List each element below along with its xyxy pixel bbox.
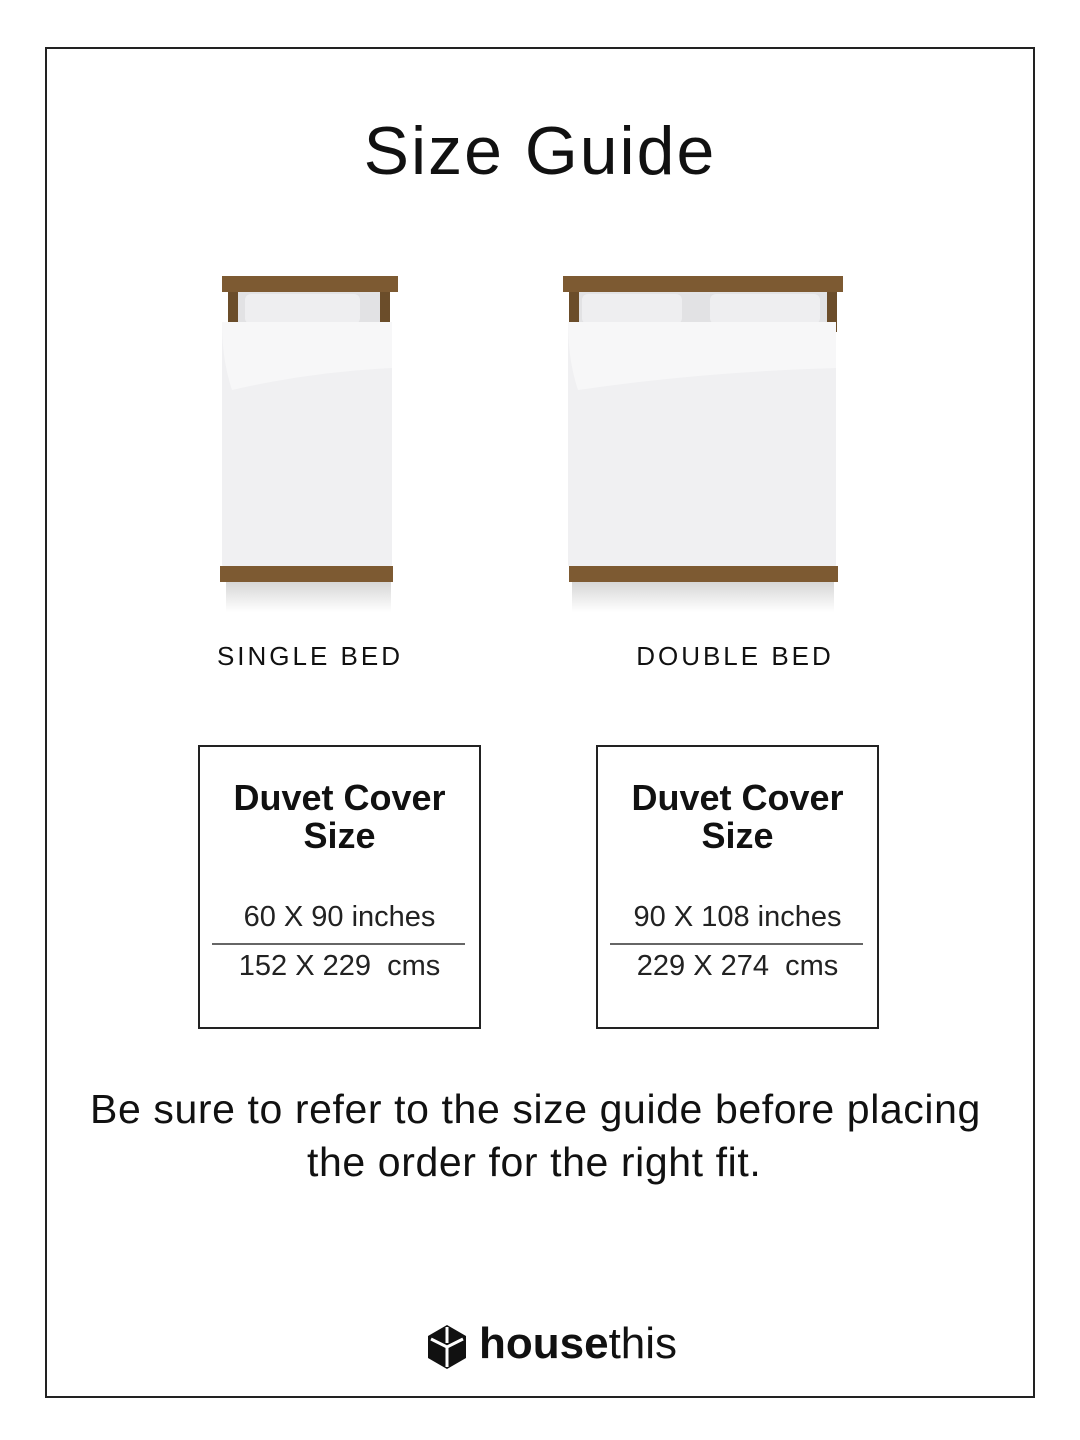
- note text: [90, 1086, 981, 1185]
- panel: single duvet size: 60 X 90 inches: [244, 901, 435, 933]
- logo: housethis: [479, 1319, 677, 1368]
- icon: single bed: [220, 276, 398, 606]
- panel: single duvet size: 152 X 229 cms: [239, 950, 440, 982]
- panel: double duvet size: Duvet Cover: [631, 777, 844, 818]
- panel: double duvet size: 229 X 274 cms: [637, 950, 838, 982]
- panel: single duvet size: Duvet Cover: [233, 777, 446, 818]
- panel: single duvet size: [198, 745, 481, 1029]
- note text: the order for the right fit.: [307, 1139, 761, 1185]
- label: double bed: DOUBLE BED: [636, 641, 834, 671]
- panel: double duvet size: Size: [701, 815, 774, 856]
- icon: double bed: [563, 276, 843, 606]
- note text: Be sure to refer to the size guide before placing: [90, 1086, 981, 1132]
- label: single bed: SINGLE BED: [217, 641, 403, 671]
- panel: single duvet size: Size: [303, 815, 376, 856]
- panel: double duvet size: [596, 745, 879, 1029]
- title: Size Guide: [364, 113, 716, 189]
- panel: double duvet size: 90 X 108 inches: [634, 901, 841, 933]
